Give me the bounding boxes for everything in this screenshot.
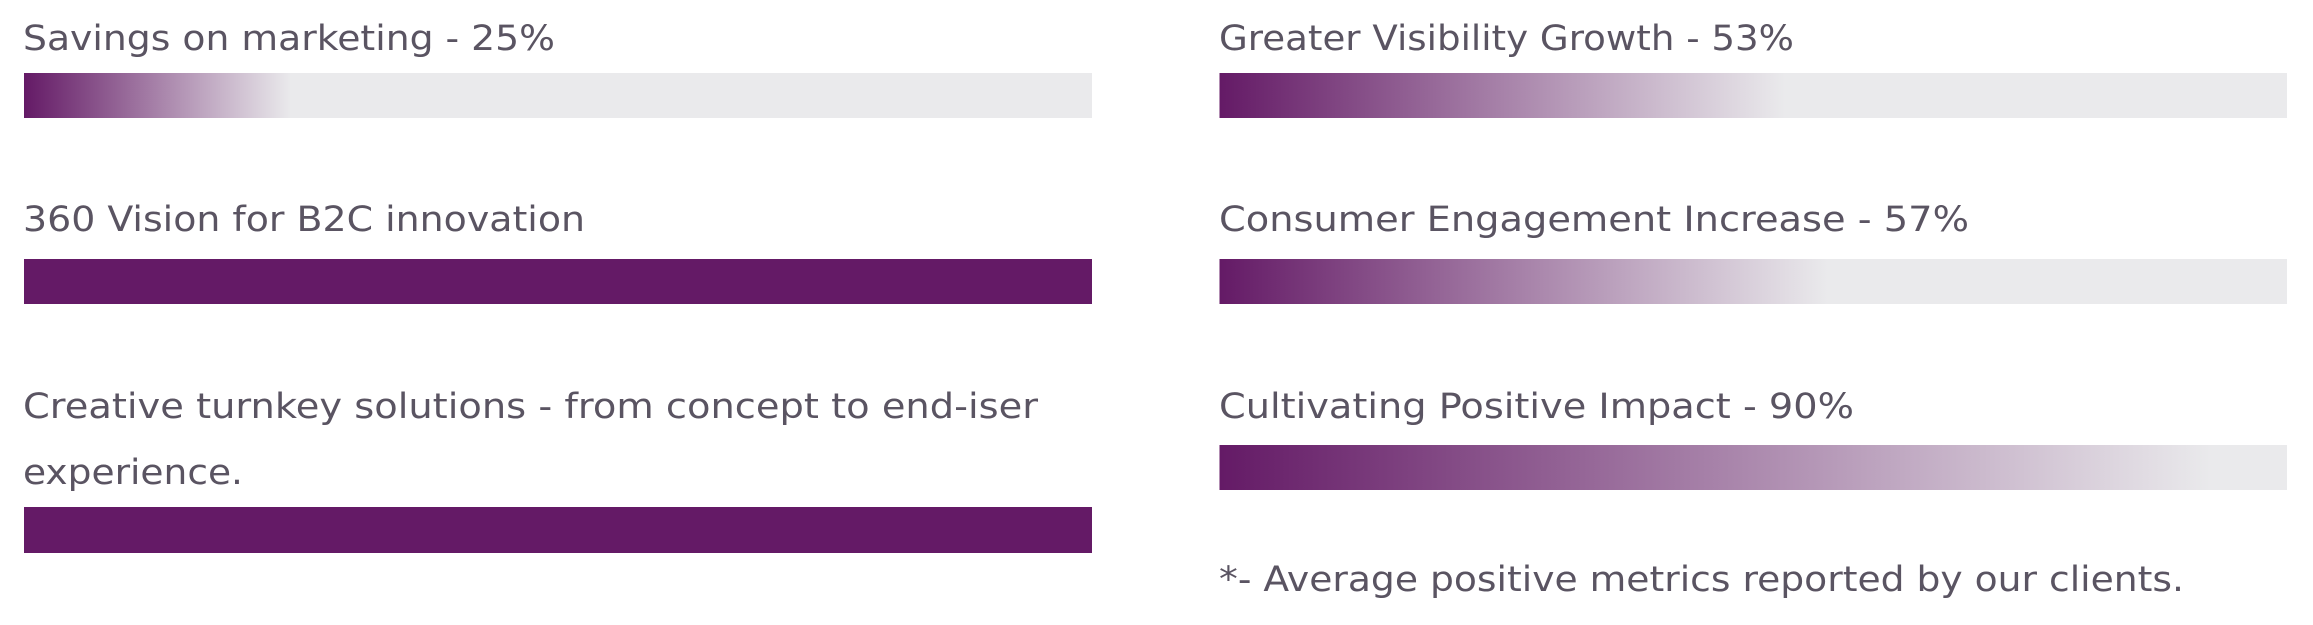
metric: cultivating positive impact bbox=[1219, 387, 2287, 490]
label: creative turnkey solutions: Creative turnkey solutions - from concept to end-iser bbox=[23, 387, 1039, 427]
bar: impact 90% bbox=[1220, 445, 2287, 490]
label: experience: experience. bbox=[23, 453, 243, 493]
footnote: *- Average positive metrics reported by our clients. bbox=[1219, 560, 2184, 600]
bar: engagement 57% bbox=[1220, 259, 2287, 304]
metric: savings on marketing bbox=[23, 19, 1092, 118]
metric: consumer engagement increase bbox=[1219, 200, 2287, 304]
label: greater visibility growth: Greater Visibility Growth - 53% bbox=[1219, 19, 1794, 59]
bar: savings 25% bbox=[24, 73, 1092, 118]
metric: creative turnkey solutions bbox=[23, 387, 1092, 553]
metric: 360 vision bbox=[23, 200, 1092, 304]
metric: greater visibility growth bbox=[1219, 19, 2287, 118]
bar: 360 vision full bbox=[24, 259, 1092, 304]
bar: visibility 53% bbox=[1220, 73, 2287, 118]
label: consumer engagement increase: Consumer Engagement Increase - 57% bbox=[1219, 200, 1969, 240]
label: savings on marketing: Savings on marketing - 25% bbox=[23, 19, 555, 59]
label: cultivating positive impact: Cultivating Positive Impact - 90% bbox=[1219, 387, 1854, 427]
label: 360 vision: 360 Vision for B2C innovation bbox=[23, 200, 585, 240]
bar: creative full bbox=[24, 507, 1092, 553]
